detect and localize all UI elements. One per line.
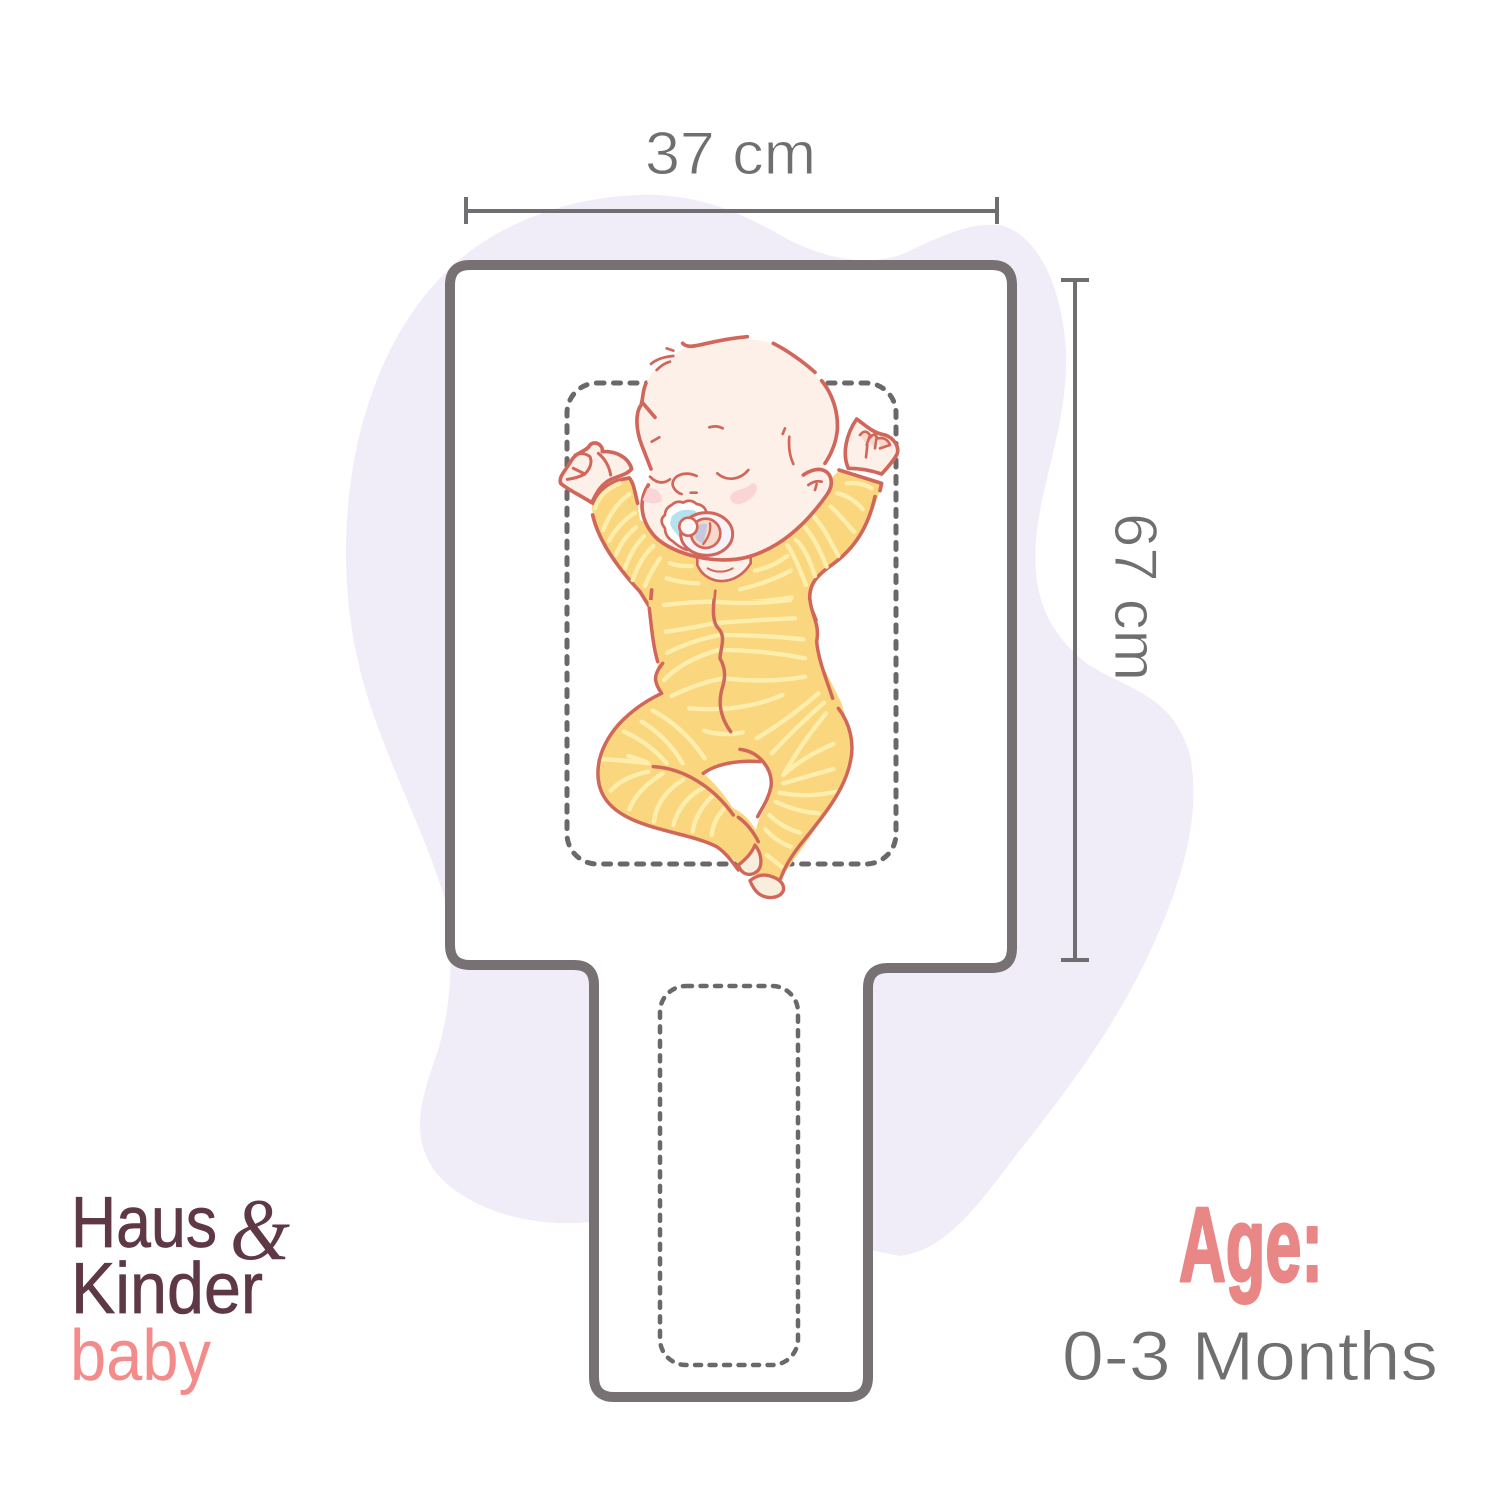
logo Haus: Haus (71, 1183, 217, 1263)
pacifier blue (670, 510, 699, 543)
head fill (637, 338, 838, 560)
age value: 0-3 Months (1062, 1317, 1438, 1395)
lavender background blob (346, 195, 1193, 1256)
pacifier ring (681, 513, 733, 555)
face details (650, 426, 822, 494)
width label: 37 cm (645, 120, 816, 187)
left fist finger lines (567, 453, 611, 479)
baby lower body (598, 600, 852, 897)
pacifier (662, 501, 733, 555)
gap between legs (703, 761, 771, 830)
baby illustration (560, 337, 898, 897)
lower suit fill (598, 600, 852, 878)
logo baby: baby (70, 1316, 211, 1396)
brand logo (70, 1182, 290, 1396)
neck collar (697, 550, 751, 581)
arm and torso outlines (593, 470, 882, 620)
dashed placement area: body (567, 383, 896, 864)
pacifier shield (662, 501, 713, 550)
pacifier button (679, 518, 697, 536)
logo Kinder: Kinder (71, 1249, 263, 1329)
stripes (602, 600, 836, 867)
head outline strokes (637, 337, 837, 560)
collar crease (708, 568, 733, 572)
upper suit fill (592, 470, 882, 625)
mat outline (450, 265, 1012, 1397)
age heading: Age: (1179, 1186, 1323, 1304)
width dimension line (466, 197, 997, 224)
left fist (560, 443, 632, 503)
height dimension line (1061, 280, 1089, 960)
baby upper body (560, 337, 898, 625)
dashed placement area: strap (660, 986, 798, 1365)
logo ampersand: & (230, 1182, 290, 1279)
bootie right (750, 875, 784, 897)
right fist (845, 419, 898, 474)
height label: 67 cm (1102, 513, 1169, 681)
bootie left (738, 845, 761, 874)
sleeve stripes (595, 483, 872, 618)
pacifier inner ring (691, 519, 720, 548)
pacifier inner line (703, 523, 710, 544)
cheeks (643, 483, 757, 504)
zip top (713, 591, 715, 618)
right fist finger lines (860, 432, 890, 457)
pacifier inner shadow (695, 524, 707, 543)
hair wisps (651, 348, 673, 370)
suit outlines (598, 600, 852, 878)
